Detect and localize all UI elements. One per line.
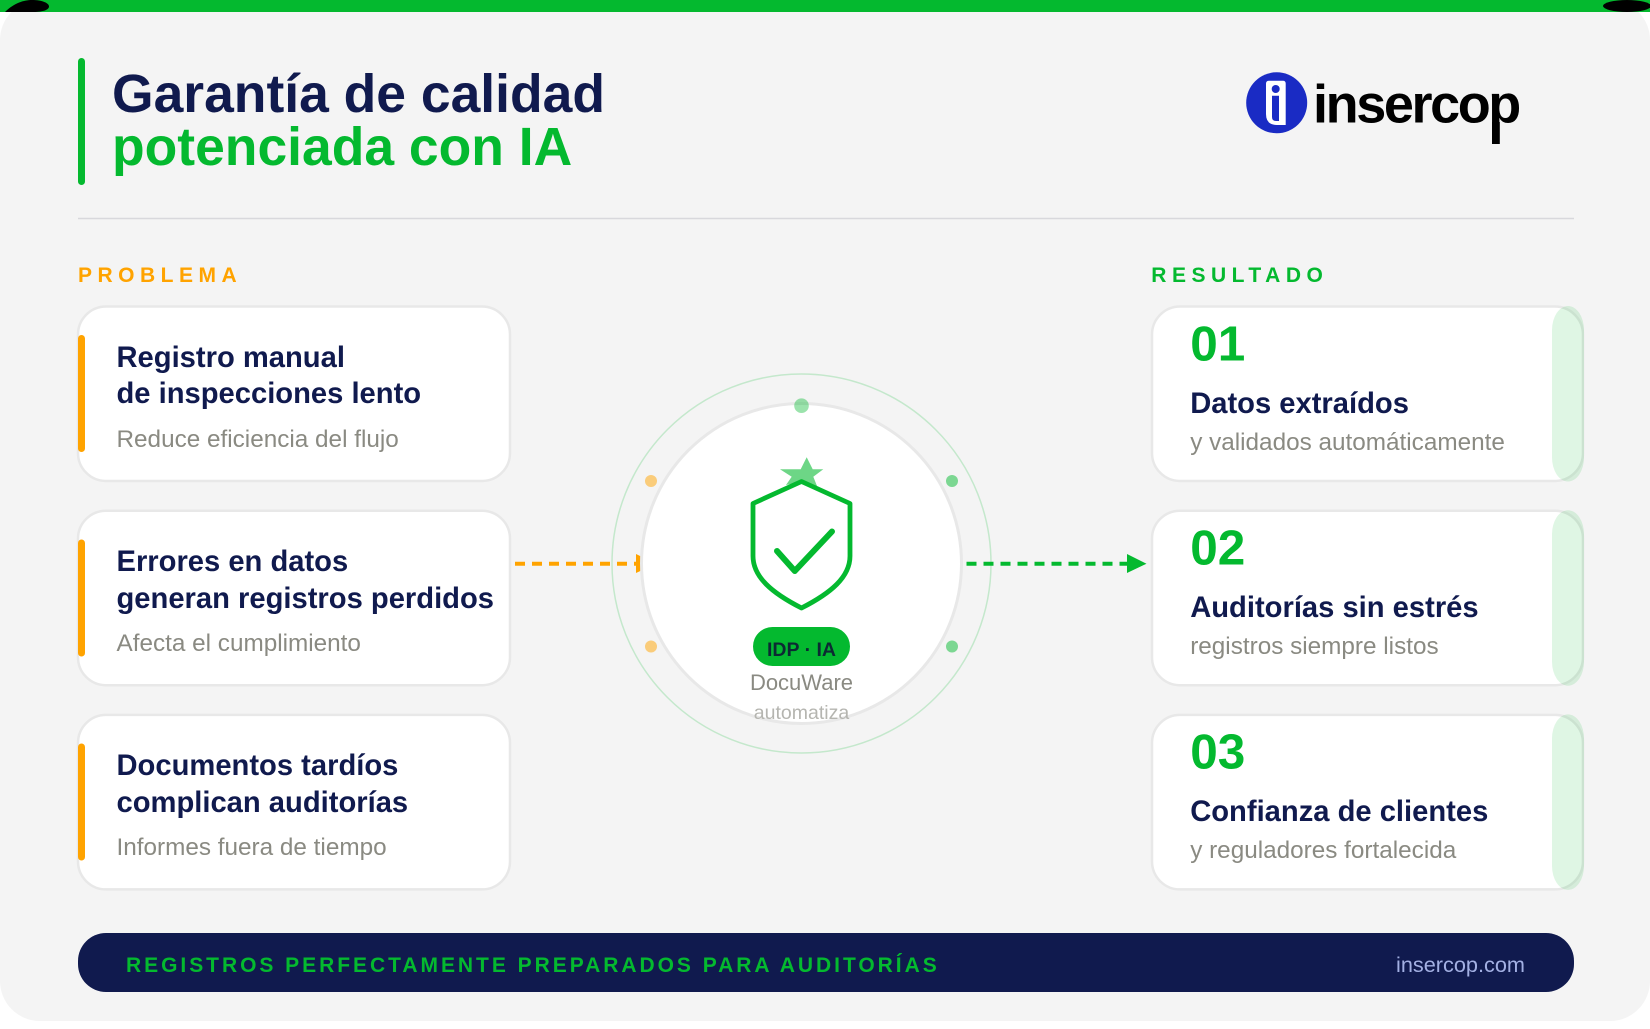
label: DocuWare: DocuWare bbox=[750, 670, 853, 695]
badge: IDP IA bbox=[753, 627, 850, 666]
panel: result card 1 bbox=[1152, 306, 1584, 482]
panel: result card 2: 02 bbox=[1190, 521, 1245, 576]
header accent bar bbox=[78, 58, 85, 185]
footer banner: REGISTROS PERFECTAMENTE PREPARADOS PARA AUDITORÍAS bbox=[126, 954, 940, 977]
panel: problem card 2 bbox=[78, 511, 510, 685]
heading: problema: PROBLEMA bbox=[78, 264, 242, 287]
logo: insercop bbox=[1246, 72, 1519, 144]
badge: IDP IA: IDP · IA bbox=[767, 639, 836, 661]
footer banner: insercop.com bbox=[1396, 952, 1525, 977]
panel: result card 2 bbox=[1152, 510, 1584, 686]
panel: result card 3: y reguladores fortalecida bbox=[1190, 837, 1457, 864]
panel: result card 3: 03 bbox=[1190, 725, 1245, 780]
panel: problem card 1: Reduce eficiencia del flujo bbox=[116, 426, 399, 453]
arrow: problem to center bbox=[515, 554, 656, 573]
panel: problem card 3 bbox=[78, 715, 510, 889]
heading: resultado: RESULTADO bbox=[1151, 264, 1328, 287]
panel: result card 1: Datos extraídos bbox=[1190, 388, 1409, 420]
top green bar bbox=[0, 0, 1650, 12]
panel: problem card 2: generan registros perdidos bbox=[116, 583, 494, 615]
central hub bbox=[612, 374, 991, 753]
panel: result card 3 bbox=[1152, 714, 1584, 890]
title: potenciada con IA bbox=[112, 118, 572, 177]
panel: result card 3: Confianza de clientes bbox=[1190, 796, 1488, 828]
panel: problem card 3: Informes fuera de tiempo bbox=[116, 834, 387, 861]
panel: result card 2: registros siempre listos bbox=[1190, 633, 1439, 660]
panel: result card 1: 01 bbox=[1190, 316, 1245, 371]
panel: problem card 3: complican auditorías bbox=[116, 787, 408, 819]
orbit dots bbox=[645, 398, 958, 652]
panel: problem card 2: Afecta el cumplimiento bbox=[116, 630, 361, 657]
logo: insercop: insercop bbox=[1313, 75, 1519, 135]
panel: problem card 1 bbox=[78, 306, 510, 481]
panel: problem card 2: Errores en datos bbox=[116, 546, 348, 578]
panel: result card 2: Auditorías sin estrés bbox=[1190, 592, 1479, 624]
panel: problem card 1: de inspecciones lento bbox=[116, 378, 421, 410]
footer banner bbox=[78, 933, 1574, 992]
panel: problem card 3: Documentos tardíos bbox=[116, 750, 398, 782]
panel: problem card 1: Registro manual bbox=[116, 342, 345, 374]
icon: star bbox=[780, 457, 823, 487]
icon: shield with check bbox=[753, 482, 850, 608]
title: Garantía de calidad bbox=[112, 65, 605, 124]
panel: result card 1: y validados automáticamente bbox=[1190, 429, 1505, 456]
arrow: center to result bbox=[966, 554, 1146, 573]
title bbox=[112, 65, 605, 177]
label: automatiza: automatiza bbox=[754, 702, 849, 724]
